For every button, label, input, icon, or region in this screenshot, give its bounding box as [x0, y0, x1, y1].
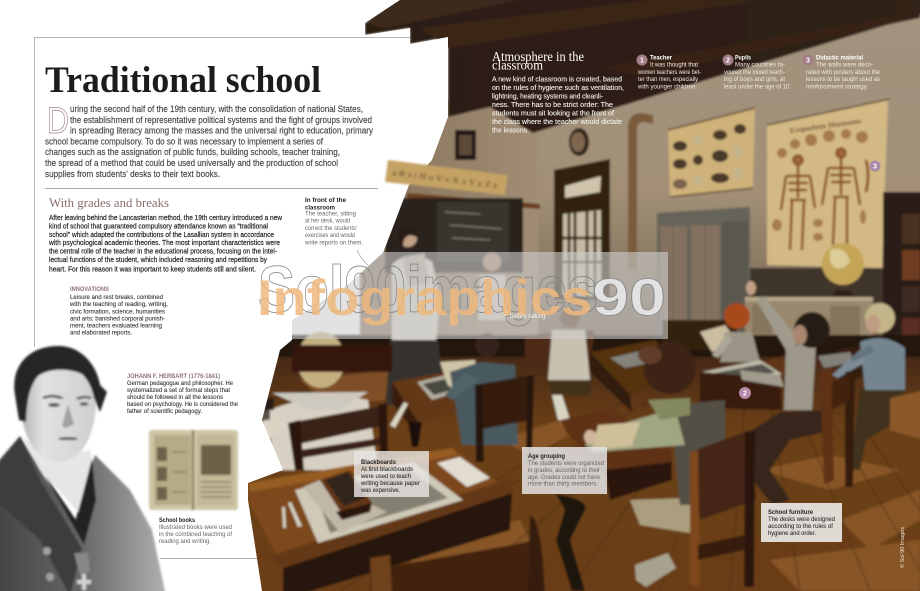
hair [14, 346, 107, 422]
loose paper [437, 457, 490, 487]
cravat [22, 436, 92, 512]
wall picture [455, 130, 476, 160]
callout: in front of the classroom: correct the students' [305, 225, 357, 232]
bookcase [882, 190, 920, 338]
intro text block: school became compulsory. To do so it was necessary to implement a series of [45, 136, 323, 147]
callout: in front of the classroom: write reports on them. [304, 239, 363, 246]
number badge 2 [722, 54, 734, 66]
note 2: pupils [722, 54, 791, 90]
section body text: with psychological academic theories. The most important characteristics were [48, 238, 280, 247]
callout: in front of the classroom [304, 197, 363, 246]
callout: blackboards [354, 451, 429, 497]
wainscot [748, 268, 888, 303]
callout: in front of the classroom: In front of the [305, 197, 346, 204]
callout: in front of the classroom: at her desk, would [305, 218, 350, 225]
iron leg center desk [556, 494, 586, 591]
intro text block: the establishment of representative political systems and the fight of groups involved [70, 115, 372, 126]
note 1: teacher: with younger children. [637, 84, 697, 90]
butterfly poster [668, 108, 755, 197]
foreground desk [248, 448, 512, 591]
section body text: heart. For this reason it was important to keep students still and silent. [49, 264, 256, 273]
note 1: teacher: Teacher [650, 54, 672, 62]
faint caption under watermark: before talking. [510, 314, 547, 320]
pupil in teal sweater [440, 333, 518, 445]
atmosphere text [492, 74, 624, 134]
marker 2 on desk: 2 [743, 390, 747, 398]
school book image [149, 430, 238, 510]
pupil raising arm [740, 281, 830, 505]
note 1: teacher: women teachers were bet- [637, 69, 701, 76]
callout: innovations: INNOVATIONS [70, 286, 110, 293]
callout: innovations: with the teaching of reading, writing, [69, 301, 168, 308]
section divider [45, 188, 378, 190]
atmosphere text: on the rules of hygiene such as ventilation, [492, 83, 624, 92]
chair behind teal pupil [475, 375, 534, 462]
atmosphere text: the class where the teacher would dictate [492, 117, 622, 126]
callout: innovations [69, 286, 168, 337]
atmosphere text: the lessons. [492, 126, 529, 134]
ink stand [248, 398, 274, 420]
Herbart text [127, 373, 238, 415]
wooden chair right [690, 430, 756, 587]
section heading: with grades and breaks: With grades and breaks [49, 196, 169, 210]
red-haired pupil [712, 303, 760, 362]
watermark logo [257, 252, 666, 327]
callout: innovations: civic formation, science, humanities [70, 308, 166, 315]
callout: in front of the classroom: classroom [305, 204, 335, 212]
caption: school books: Illustrated books were used [159, 524, 232, 531]
callout: age grouping: age. Grades could not have [528, 474, 600, 481]
marker 3 on anatomy poster: 3 [873, 164, 877, 170]
medal [74, 553, 91, 590]
waistcoat [42, 458, 96, 545]
section body text: kind of school that guaranteed compulsory attendance known as "traditional [49, 221, 268, 230]
panel frame lines [34, 38, 410, 558]
callout: blackboards: writing because paper [360, 480, 421, 487]
Herbart text: based on psychology. He is considered the [127, 401, 238, 408]
caption: school books [159, 517, 232, 545]
child in back left [548, 308, 592, 420]
Herbart text: JOHANN F. HERBART (1776-1841) [127, 373, 220, 380]
outlined word: Sol90images [258, 252, 598, 326]
note 1: teacher: It was thought that [650, 62, 698, 68]
globe [822, 243, 864, 300]
note 1: teacher: ter than men, especially [638, 76, 699, 83]
callout: blackboards: were used to teach [360, 473, 411, 480]
coat buttons [43, 547, 54, 581]
child at blackboard [478, 253, 508, 320]
callout: age grouping: more than thirty members. [528, 480, 598, 488]
portrait of Herbart [0, 346, 166, 591]
section body text: school" which adapted the contributions of the Lasallian system in accordance [49, 230, 274, 239]
back row desks [524, 319, 864, 412]
callout: blackboards: Blackboards [361, 459, 396, 466]
section body text: lectual functions of the student, which included reasoning and repetitions by [49, 255, 267, 264]
section body text: the central rolle of the teacher in the educational process, focusing on the intel- [49, 247, 277, 256]
pupil in green sleeves [584, 342, 725, 533]
intro text block: in spreading literacy among the masses and the universal right to education, primary [70, 126, 373, 137]
desk behind left [292, 345, 392, 372]
intro text block: supplies from students' desks to their text books. [45, 169, 220, 180]
note 1: teacher: 1 [640, 58, 644, 64]
callout: innovations: and arts; banished corporal punish- [70, 315, 165, 322]
marker 3 on anatomy poster [870, 160, 880, 172]
note 2: pupils: voured the mixed teach- [724, 69, 785, 76]
gray cabinet [657, 207, 750, 345]
intro text block [45, 100, 373, 180]
callout: innovations: Leisure and rest breaks, combined [70, 294, 163, 301]
note 2: pupils: Many countries fa- [735, 62, 785, 68]
atmosphere text: lightning, heating systems and cleanli- [492, 92, 604, 100]
callout: blackboards: At first blackboards [361, 466, 414, 473]
alphabet banner: a R s t H u V v X x Y y Z z [392, 168, 499, 190]
note 2: pupils: Pupils [735, 54, 751, 62]
note 3: didactic material: Didactic material [816, 54, 863, 62]
number badge 3 [802, 54, 814, 66]
number badge 1 [636, 54, 648, 66]
leader line to teacher [357, 250, 376, 272]
section body text [48, 213, 283, 273]
coat [0, 436, 166, 591]
intro text block: changes such as the assignation of public funds, building schools, teacher training, [45, 147, 340, 158]
orange word: Infographics [257, 270, 592, 326]
note 3: didactic material: reinforcement strategy. [806, 84, 868, 90]
heading: atmosphere in the classroom [492, 49, 584, 72]
middle left desk [388, 372, 454, 448]
callout: in front of the classroom: The teacher, sitting [305, 210, 356, 218]
callout: innovations: and elaborated reports. [70, 330, 132, 337]
small desk far right [890, 390, 920, 440]
teacher [386, 227, 445, 405]
atmosphere text: A new kind of classroom is created, based [492, 74, 622, 84]
desk foreground center [561, 408, 672, 500]
watermark band [292, 252, 668, 339]
callout: innovations: ment, teachers evaluated learning [70, 322, 162, 330]
note 3: didactic material [802, 54, 880, 90]
Herbart text: systematized a set of formal steps that [127, 387, 230, 394]
books on desk [303, 470, 387, 533]
alphabet banner [385, 160, 508, 195]
chair behind raising pupil [820, 368, 855, 487]
ceiling beams [365, 0, 920, 133]
callout: school furniture: hygiene and order. [768, 530, 816, 537]
side wall left [360, 100, 538, 350]
caption: school books: reading and writing. [159, 538, 211, 545]
note 3: didactic material: 3 [806, 58, 810, 64]
face [20, 367, 96, 461]
blond pupil on right [832, 303, 905, 470]
section body text: After leaving behind the Lancasterian method, the 19th century introduced a new [49, 213, 283, 222]
blond pupil foreground [250, 332, 378, 470]
marker 2 on desk [739, 387, 751, 399]
Herbart text: father of scientific pedagogy. [127, 408, 202, 415]
note 2: pupils: 2 [726, 58, 730, 64]
note 3: didactic material: rated with posters about the [806, 69, 880, 76]
callout: school furniture: The desks were designed [768, 516, 835, 523]
callout: age grouping: Age grouping [528, 453, 565, 460]
anatomy poster: Esqueleto Humano [789, 117, 862, 135]
callout: school furniture [761, 503, 842, 542]
callout: age grouping: in grades, according to their [528, 467, 601, 474]
book on floor [635, 553, 676, 587]
facial features [42, 395, 92, 440]
white number: 90 [592, 269, 666, 327]
foreground chair back [370, 515, 545, 591]
lapels [0, 436, 82, 591]
caption: school books: School books [159, 517, 195, 524]
wooden floor [240, 335, 920, 591]
chair behind blond pupil [288, 403, 388, 470]
sideboard [744, 295, 875, 338]
note 1: teacher [636, 54, 701, 90]
callout: age grouping: The students were organized [528, 460, 604, 467]
intro text block: uring the second half of the 19th century, with the consolidation of national States, [70, 104, 363, 115]
back wall right [530, 0, 920, 350]
chalk sticks [282, 502, 302, 528]
drop cap: D [47, 100, 69, 141]
classroom illustration [240, 0, 920, 591]
Herbart text: should be followed in all the lessons [127, 394, 224, 401]
anatomy poster [767, 99, 890, 268]
callout: blackboards: was expensive. [360, 487, 400, 494]
heading: atmosphere in the classroom: classroom [492, 58, 543, 72]
wall clock [569, 128, 589, 156]
caption: school books: in the combined teaching of [159, 531, 232, 538]
note 3: didactic material: The walls were deco- [816, 62, 873, 68]
intro text block: the spread of a method that could be used universally and the production of school [45, 158, 338, 169]
middle desk with slate [699, 354, 786, 411]
note 2: pupils: ing of boys and girls, at [724, 76, 785, 83]
title: Traditional school [45, 60, 321, 101]
atmosphere text: students must sit looking at the front of [492, 108, 614, 118]
note 2: pupils: least under the age of 10. [724, 84, 791, 90]
callout: school furniture: according to the rules of [768, 523, 833, 530]
stove pipe [628, 113, 653, 270]
callout: in front of the classroom: exercises and would [305, 232, 355, 239]
callout: school furniture: School furniture [768, 509, 813, 516]
note 3: didactic material: lessons to be taught used as [806, 76, 880, 83]
atmosphere text: ness. There has to be strict order: The [492, 100, 613, 109]
Herbart text: German pedagogue and philosopher. He [127, 380, 233, 387]
heading: atmosphere in the classroom: Atmosphere in the [492, 49, 584, 64]
copyright note: © Sol 90 Images [899, 527, 906, 568]
door with window [554, 159, 610, 300]
slate on desk [295, 462, 463, 543]
callout: age grouping [522, 447, 607, 494]
blackboard [385, 193, 540, 273]
